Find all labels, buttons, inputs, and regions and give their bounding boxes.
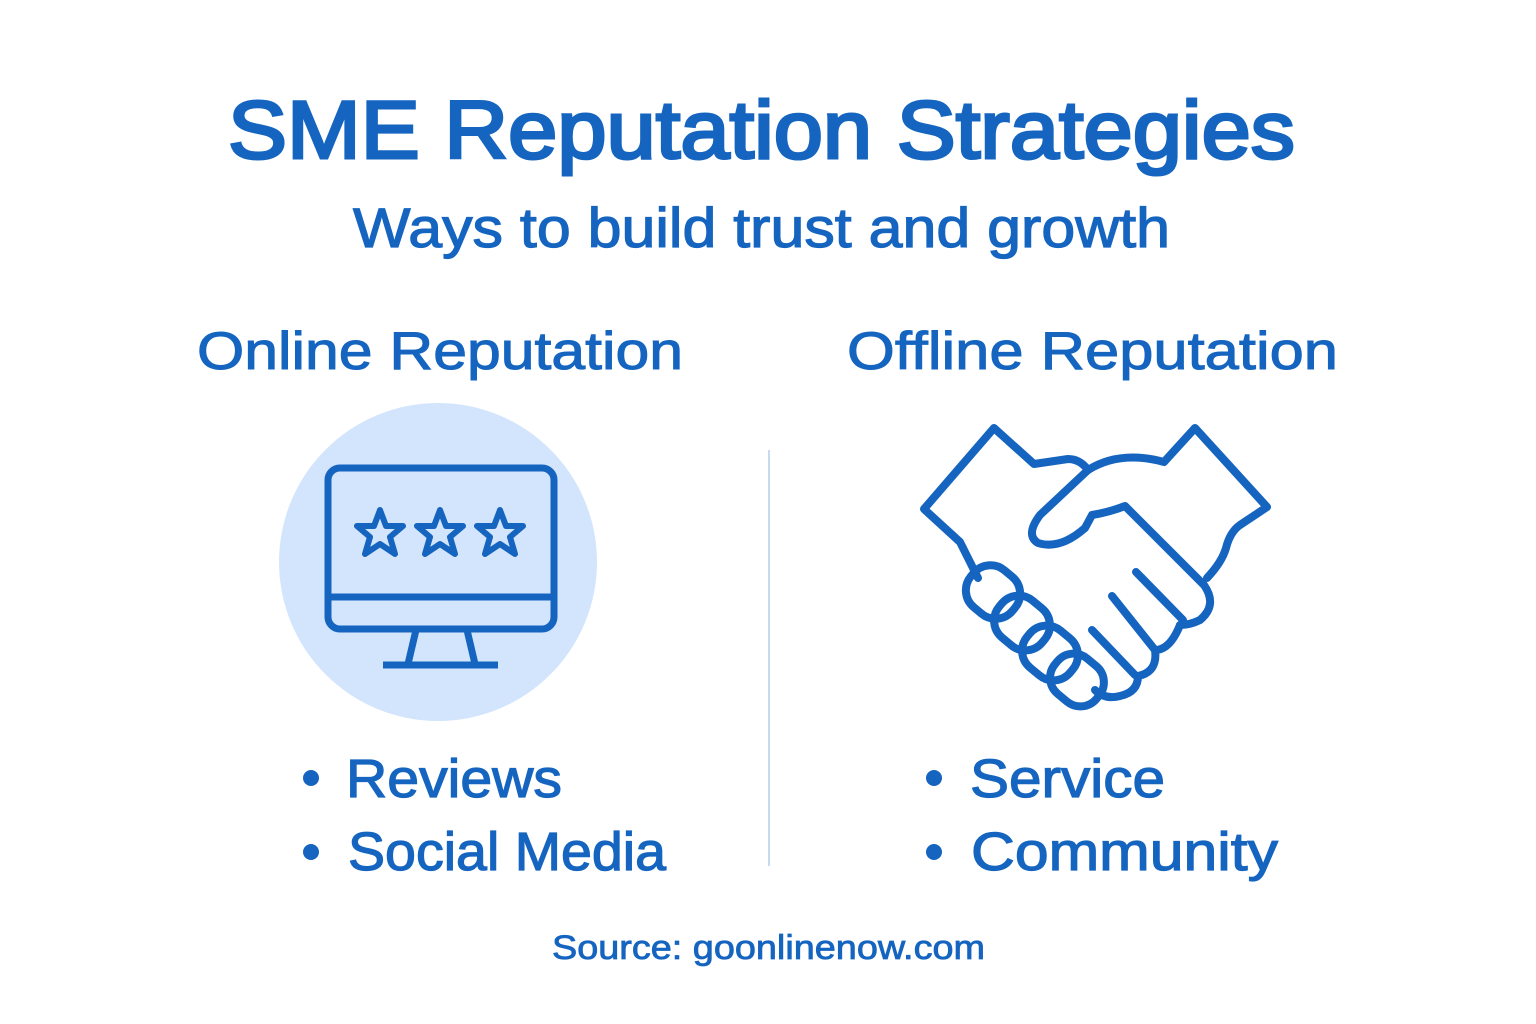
bullets: offline: Community <box>971 822 1278 882</box>
source: Source: goonlinenow.com <box>552 929 985 967</box>
subtitle: Ways to build trust and growth <box>353 196 1170 259</box>
heading: offline: Offline Reputation <box>847 322 1338 381</box>
bullets: online: Reviews <box>346 749 562 809</box>
bullets: offline <box>926 749 1278 882</box>
bullets: online: Social Media <box>348 822 667 882</box>
bullets: online <box>303 749 667 882</box>
heading: online: Online Reputation <box>197 322 683 381</box>
bullets: offline: Service <box>970 749 1165 809</box>
icon: handshake <box>924 428 1267 715</box>
title: SME Reputation Strategies <box>228 85 1295 176</box>
icon: monitor with stars <box>279 403 597 721</box>
